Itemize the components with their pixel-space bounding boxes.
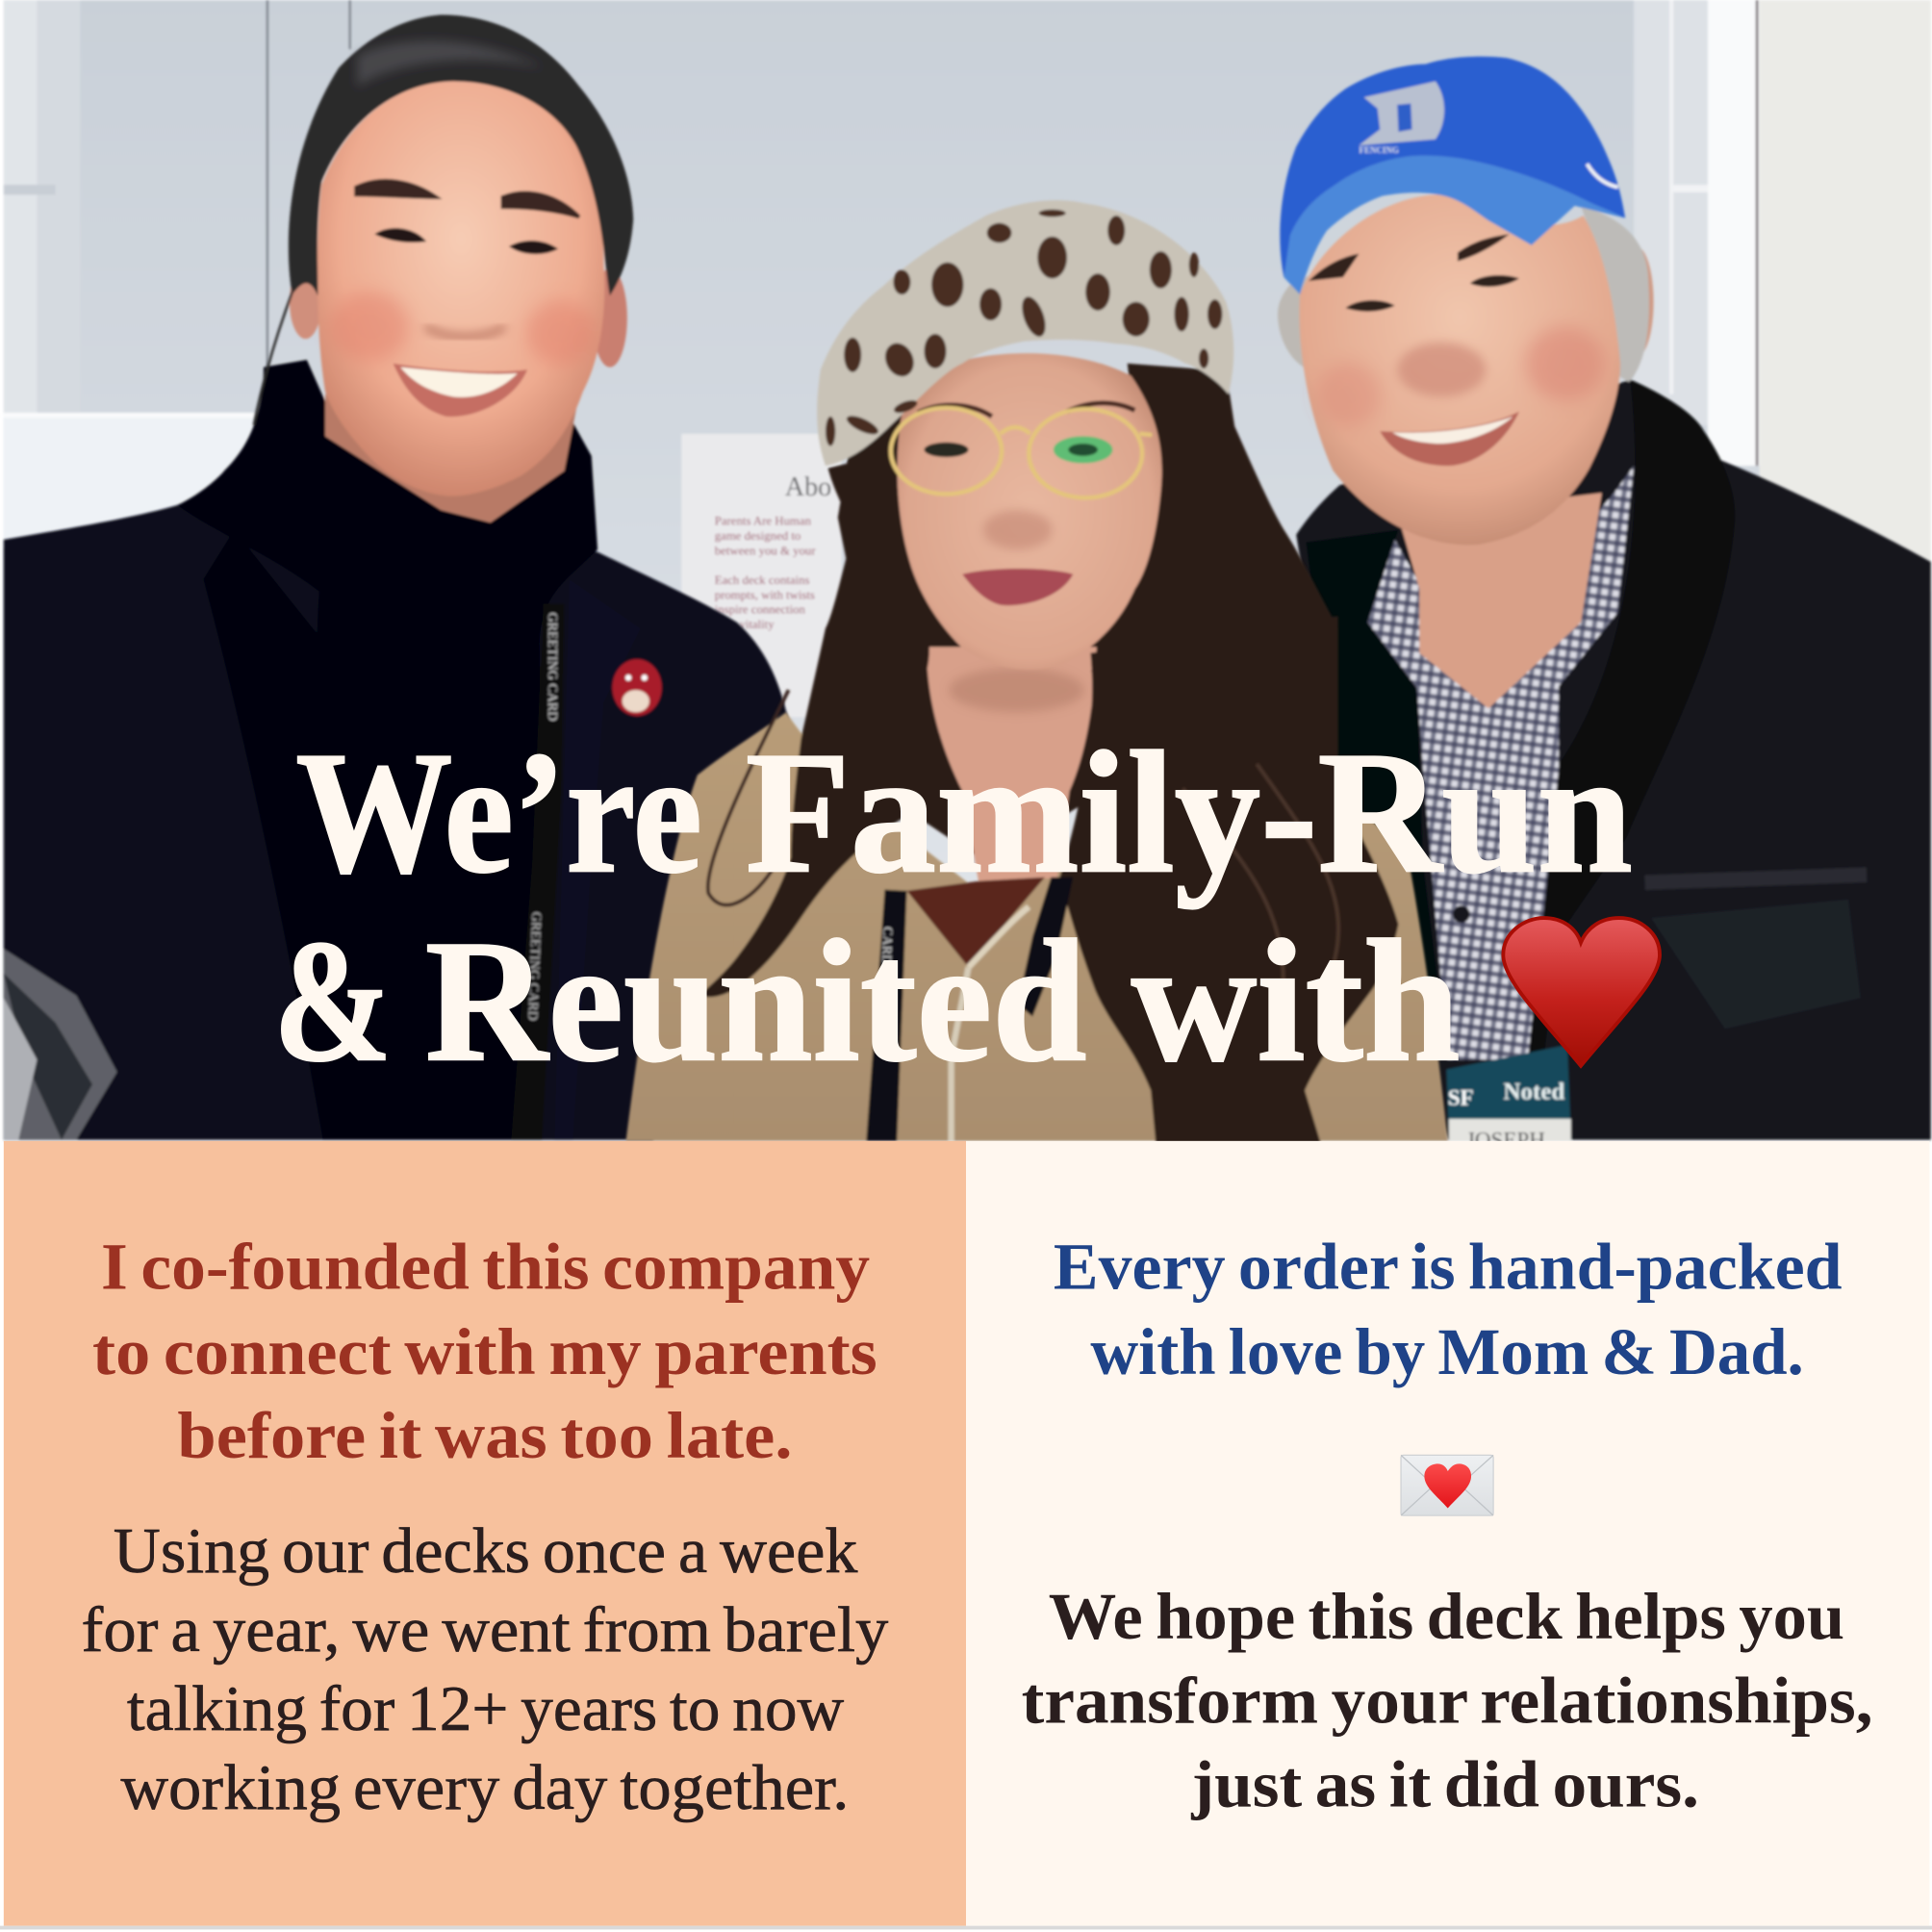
title line 1: We’re <box>295 716 702 909</box>
title <box>273 716 1633 1098</box>
founder heading <box>92 1230 877 1472</box>
panel: founder story <box>4 1141 966 1926</box>
founder story text: for a year, we went from barely <box>82 1595 889 1665</box>
founder story text: working every day together. <box>120 1753 849 1823</box>
person: son on the left: GREETING CARD <box>545 612 560 721</box>
tan jacket <box>626 712 1448 1141</box>
blazer <box>4 505 789 1140</box>
hair on the right side <box>1059 616 1398 1143</box>
founder story text <box>82 1516 889 1823</box>
facial features <box>1309 254 1360 281</box>
title line 1 <box>295 716 1633 909</box>
hair over left shoulder <box>699 616 936 997</box>
hair beside the left cheek <box>838 369 929 672</box>
bottom edge shadow <box>0 1926 1932 1929</box>
hood and black sweater <box>177 360 597 1140</box>
poster behind the family: Each deck contains <box>715 573 810 587</box>
icon: red heart <box>1503 918 1660 1066</box>
blouse and collar <box>907 877 1045 967</box>
leopard beret <box>817 200 1233 466</box>
name badge <box>1446 1045 1571 1140</box>
title line 1: Family-Run <box>746 716 1633 909</box>
face <box>1299 194 1620 545</box>
person: son on the left <box>4 14 789 1140</box>
founder story text: talking for 12+ years to now <box>127 1674 844 1744</box>
photo backdrop <box>4 0 1931 1141</box>
poster behind the family: inspire connection <box>715 603 806 617</box>
gingham shirt <box>1367 466 1634 1059</box>
cap logo: FENCING <box>1360 145 1399 155</box>
panel: hand-packed message <box>966 1141 1929 1926</box>
person: son on the left: GREETING CARD <box>524 912 544 1021</box>
long hair back <box>801 369 1338 862</box>
grey hair <box>1581 206 1649 382</box>
founder heading: before it was too late. <box>177 1398 792 1472</box>
swept back hair <box>289 14 633 295</box>
blue cap crown <box>1280 57 1625 277</box>
poster behind the family: between you & your <box>715 544 816 557</box>
gold glasses <box>891 408 1152 497</box>
pin badge <box>612 659 662 716</box>
title line 2: Reunited <box>425 904 1087 1098</box>
facial features <box>918 405 992 417</box>
neck <box>1398 493 1602 708</box>
face <box>318 82 604 496</box>
title line 2: with <box>1131 904 1461 1098</box>
founder heading: I co-founded this company <box>101 1230 870 1304</box>
hand-packed heading: with love by Mom & Dad. <box>1090 1314 1804 1388</box>
hand-packed heading: Every order is hand-packed <box>1054 1230 1843 1304</box>
ears <box>290 265 321 339</box>
face <box>898 353 1162 670</box>
neck and chest <box>927 647 1097 887</box>
facial features <box>356 181 436 197</box>
person: father on the right <box>1278 57 1931 1152</box>
cap logo <box>1360 82 1444 155</box>
lanyards <box>866 890 907 1141</box>
poster behind the family: Abo <box>785 472 831 502</box>
poster behind the family: prompts, with twists <box>715 588 815 601</box>
glass award <box>4 949 117 1140</box>
closing message: just as it did ours. <box>1190 1746 1699 1820</box>
person: father on the right: Noted <box>1503 1077 1564 1105</box>
hand-packed heading <box>1054 1230 1843 1388</box>
closing message: We hope this deck helps you <box>1049 1579 1844 1653</box>
person: mother in the centre <box>626 200 1448 1143</box>
person: father on the right: SF <box>1448 1085 1474 1110</box>
jacket <box>1296 379 1931 1140</box>
closing message: transform your relationships, <box>1022 1663 1873 1737</box>
neck <box>325 394 579 522</box>
poster behind the family: Parents Are Human <box>715 515 812 528</box>
person: father on the right: JOSEPH <box>1466 1127 1545 1152</box>
closing message <box>1022 1579 1873 1820</box>
icon: envelope with heart <box>1401 1455 1493 1515</box>
poster behind the family: vitality <box>739 618 775 631</box>
title line 2: & <box>273 904 392 1098</box>
cheek blush <box>1525 326 1604 400</box>
founder story text: Using our decks once a week <box>114 1516 858 1587</box>
hair beside the right cheek <box>1090 364 1282 672</box>
ear <box>1619 246 1654 357</box>
blue cap brim <box>1284 156 1625 294</box>
person: mother in the centre: CARD <box>878 927 895 965</box>
founder heading: to connect with my parents <box>92 1314 877 1388</box>
lanyard <box>511 604 565 1140</box>
poster behind the family <box>681 434 842 717</box>
title line 2 <box>273 904 1461 1098</box>
cheek blush <box>330 292 409 361</box>
poster behind the family: game designed to <box>715 529 801 543</box>
panel: family photo <box>4 0 1931 1152</box>
